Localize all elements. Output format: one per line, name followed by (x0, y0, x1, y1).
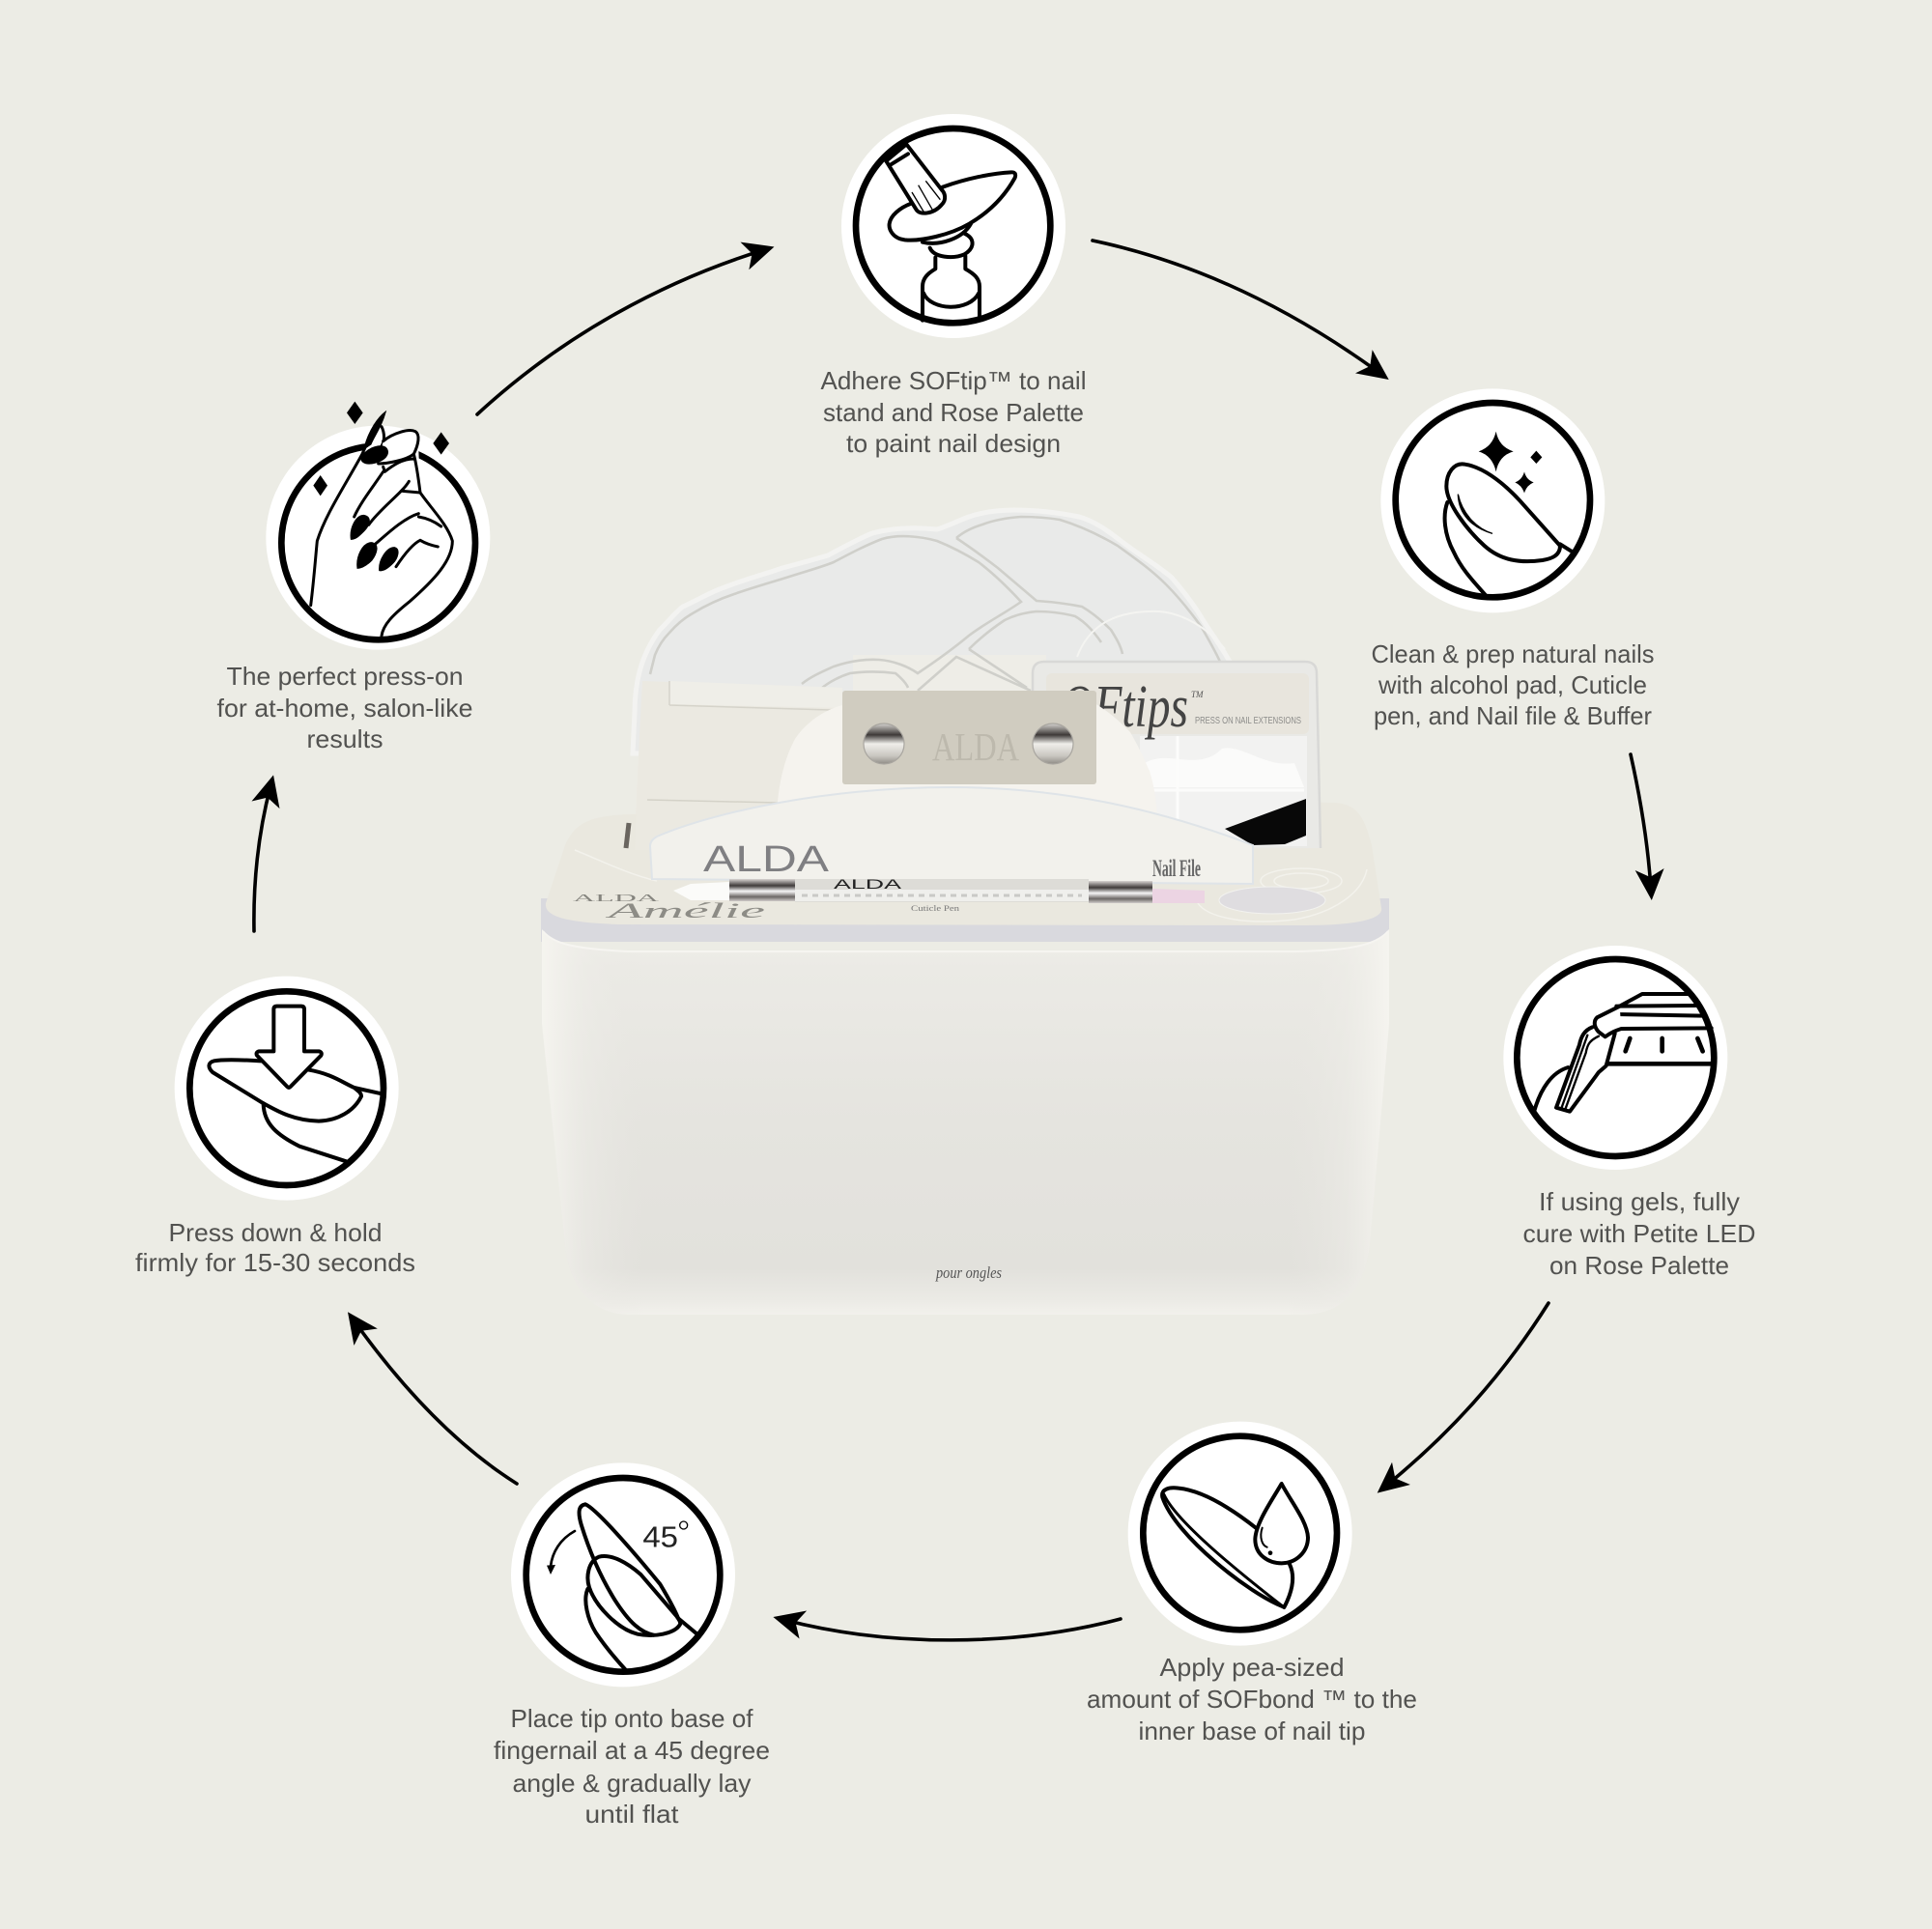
icon: drop on nail tip (1128, 1422, 1352, 1646)
text: step 2 caption: Clean & prep natural nails (1372, 639, 1654, 668)
box body: pour ongles (935, 1263, 1002, 1282)
snap buttons (864, 723, 1073, 764)
nail file: Nail File (1152, 856, 1201, 882)
icon: nail under LED lamp (1503, 946, 1727, 1170)
text: step 3 caption: cure with Petite LED (1522, 1219, 1756, 1248)
arrow: step 5 to step 6 (355, 1321, 517, 1484)
SOFtips box: PRESS ON NAIL EXTENSIONS (1195, 715, 1301, 726)
text: step 4 caption: Apply pea-sized (1159, 1653, 1345, 1682)
text: step 4 caption: amount of SOFbond ™ to the (1087, 1685, 1417, 1714)
step 4: apply SOFbond (1087, 1422, 1417, 1745)
text: step 6 caption: Press down & hold (168, 1218, 383, 1247)
arrow: step 3 to step 4 (1386, 1303, 1548, 1486)
arrow: step 7 to step 1 (477, 250, 763, 414)
text: step 7 caption (216, 662, 473, 753)
text: step 1 caption: Adhere SOFtip™ to nail (821, 366, 1086, 395)
leather strap: ALDA (932, 724, 1019, 769)
text: step 3 caption: on Rose Palette (1549, 1251, 1729, 1280)
tray lip (546, 802, 1381, 925)
text: step 6 caption: firmly for 15-30 seconds (135, 1248, 415, 1277)
icon: manicured hand (266, 402, 490, 650)
text: step 6 caption (135, 1218, 415, 1277)
text: step 5 caption: until flat (585, 1800, 679, 1829)
text: step 2 caption (1372, 639, 1654, 730)
tray hole (1219, 887, 1325, 914)
text: step 3 caption (1522, 1187, 1756, 1280)
arrow: step 4 to step 5 (784, 1619, 1121, 1640)
text: step 5 caption (494, 1704, 770, 1829)
step 1: paint nail (821, 114, 1086, 458)
arrow: step 6 to step 7 (254, 786, 270, 931)
text: step 4 caption: inner base of nail tip (1138, 1716, 1366, 1745)
text: step 1 caption: stand and Rose Palette (823, 398, 1084, 427)
SOFtips box: OFtips (1061, 674, 1188, 740)
product: ALDA Amélie kit (541, 510, 1389, 1315)
text: step 2 caption: with alcohol pad, Cuticle (1378, 670, 1647, 699)
tray label: ALDA Amélie (573, 894, 959, 922)
text: step 1 caption: to paint nail design (846, 429, 1061, 458)
step 7: final result (216, 402, 490, 753)
left card (635, 681, 846, 850)
icon: sparkling nail (1380, 388, 1605, 612)
text: step 4 caption (1087, 1653, 1417, 1745)
cuticle pen: ALDA (834, 876, 902, 892)
icon: brush on nail stand (841, 114, 1065, 338)
text: step 2 caption: pen, and Nail file & Buffer (1374, 701, 1652, 730)
text: step 5 caption: Place tip onto base of (510, 1704, 753, 1733)
box body (541, 898, 1389, 1315)
icon: nail tip at 45 degrees: 45 (642, 1521, 678, 1554)
text: step 7 caption: The perfect press-on (226, 662, 464, 691)
white arch stand (778, 703, 1157, 816)
tray label: ALDA Amélie: Cuticle Pen (911, 904, 959, 913)
tray label: ALDA Amélie: ALDA (573, 894, 661, 904)
step 6: press down (135, 977, 415, 1277)
nail file (650, 787, 1253, 884)
text: step 5 caption: angle & gradually lay (512, 1769, 752, 1798)
step 5: place tip at 45 degrees (494, 1462, 770, 1829)
step 3: cure with LED (1503, 946, 1756, 1280)
SOFtips box: TM (1191, 690, 1204, 699)
arrow: step 1 to step 2 (1093, 241, 1379, 373)
text: step 7 caption: for at-home, salon-like (216, 694, 473, 723)
nail file: ALDA (703, 839, 830, 880)
icon: press arrow on nail (175, 977, 399, 1201)
text: step 7 caption: results (307, 724, 383, 753)
text: step 1 caption (821, 366, 1086, 458)
step 2: clean and prep (1372, 388, 1654, 730)
text: step 3 caption: If using gels, fully (1539, 1187, 1740, 1216)
text: step 5 caption: fingernail at a 45 degree (494, 1736, 770, 1765)
rose palette (633, 510, 1241, 753)
tray label: ALDA Amélie: Amélie (604, 898, 766, 922)
SOFtips box (1033, 611, 1321, 848)
arrow: step 2 to step 3 (1631, 754, 1651, 889)
icon: nail tip at 45 degrees (511, 1462, 735, 1687)
leather strap (842, 691, 1096, 784)
cuticle pen (673, 876, 1205, 903)
